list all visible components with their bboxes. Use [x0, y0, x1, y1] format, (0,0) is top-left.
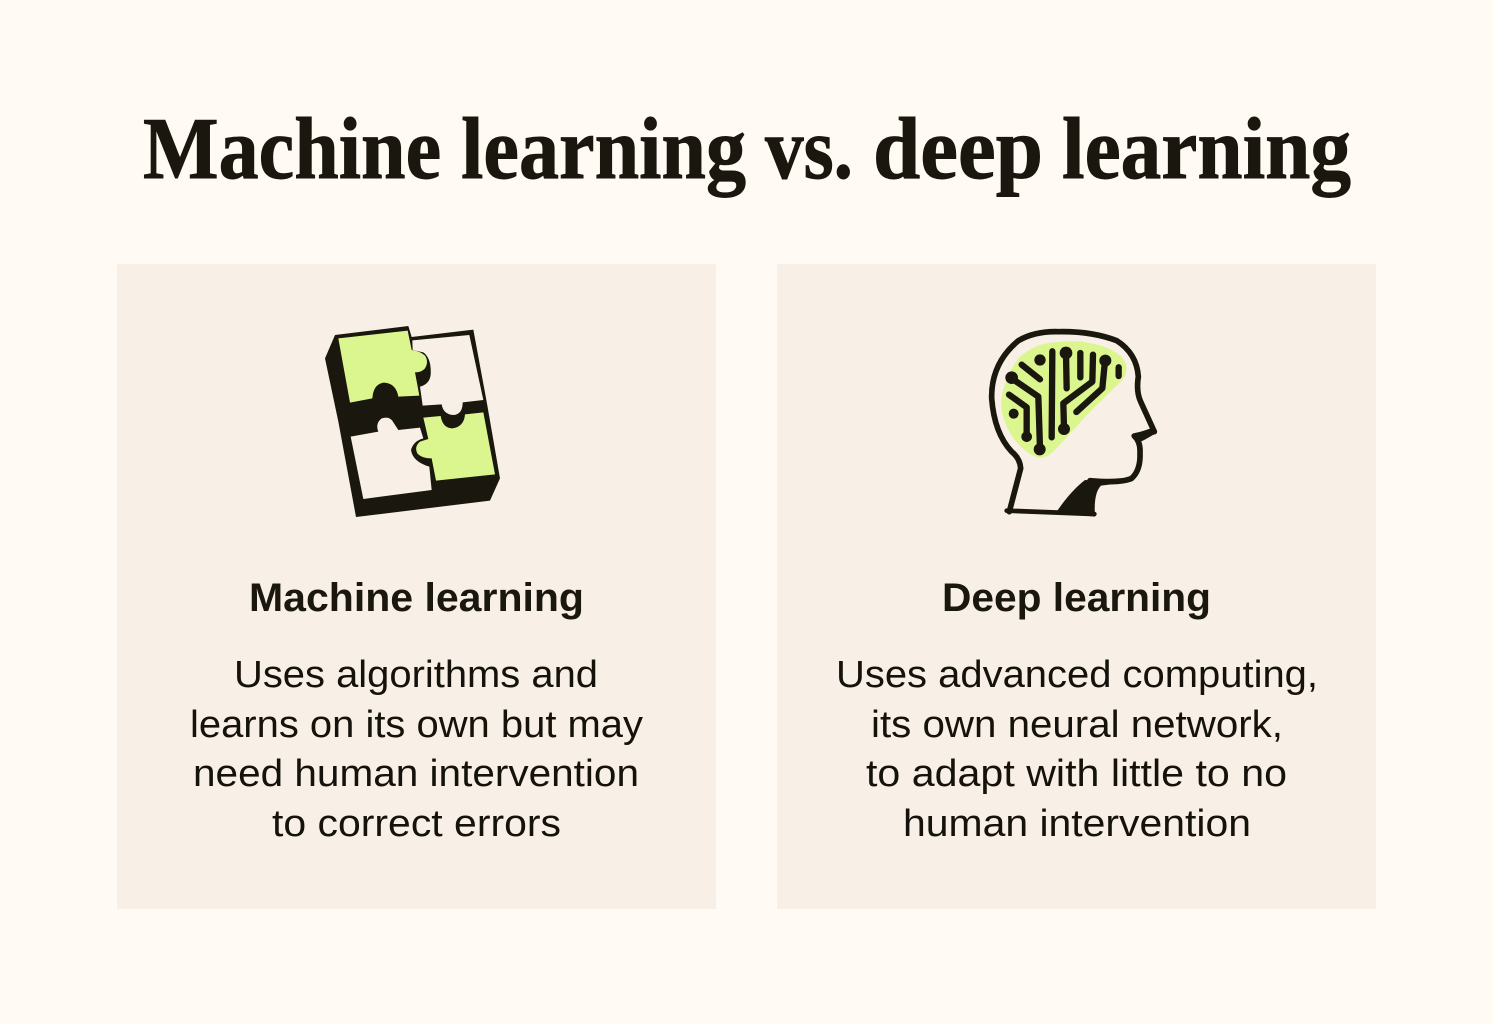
text block: deep learning description: human intervention	[903, 803, 1251, 845]
heading: machine learning: Machine learning	[249, 576, 584, 620]
text block: machine learning description: need human intervention	[193, 753, 639, 795]
icon: puzzle pieces	[325, 326, 500, 517]
text block: machine learning description: Uses algorithms and	[234, 654, 598, 696]
title: vs.	[765, 101, 853, 198]
text block: deep learning description	[836, 654, 1318, 845]
title: learning	[1062, 101, 1351, 198]
text block: machine learning description: to correct errors	[272, 803, 561, 845]
circuit traces	[1009, 351, 1119, 448]
panel: machine learning	[117, 264, 716, 909]
title: deep	[873, 101, 1043, 198]
text block: deep learning description: its own neural network,	[871, 704, 1283, 746]
title	[143, 101, 1351, 198]
panel: deep learning	[777, 264, 1376, 909]
text block: deep learning description: to adapt with little to no	[866, 753, 1287, 795]
icon: head with circuit brain	[992, 332, 1157, 517]
text block: machine learning description	[190, 654, 643, 845]
heading: deep learning: Deep learning	[942, 576, 1211, 620]
text block: deep learning description: Uses advanced computing,	[836, 654, 1318, 696]
title: Machine learning	[143, 101, 746, 198]
text block: machine learning description: learns on its own but may	[190, 704, 643, 746]
